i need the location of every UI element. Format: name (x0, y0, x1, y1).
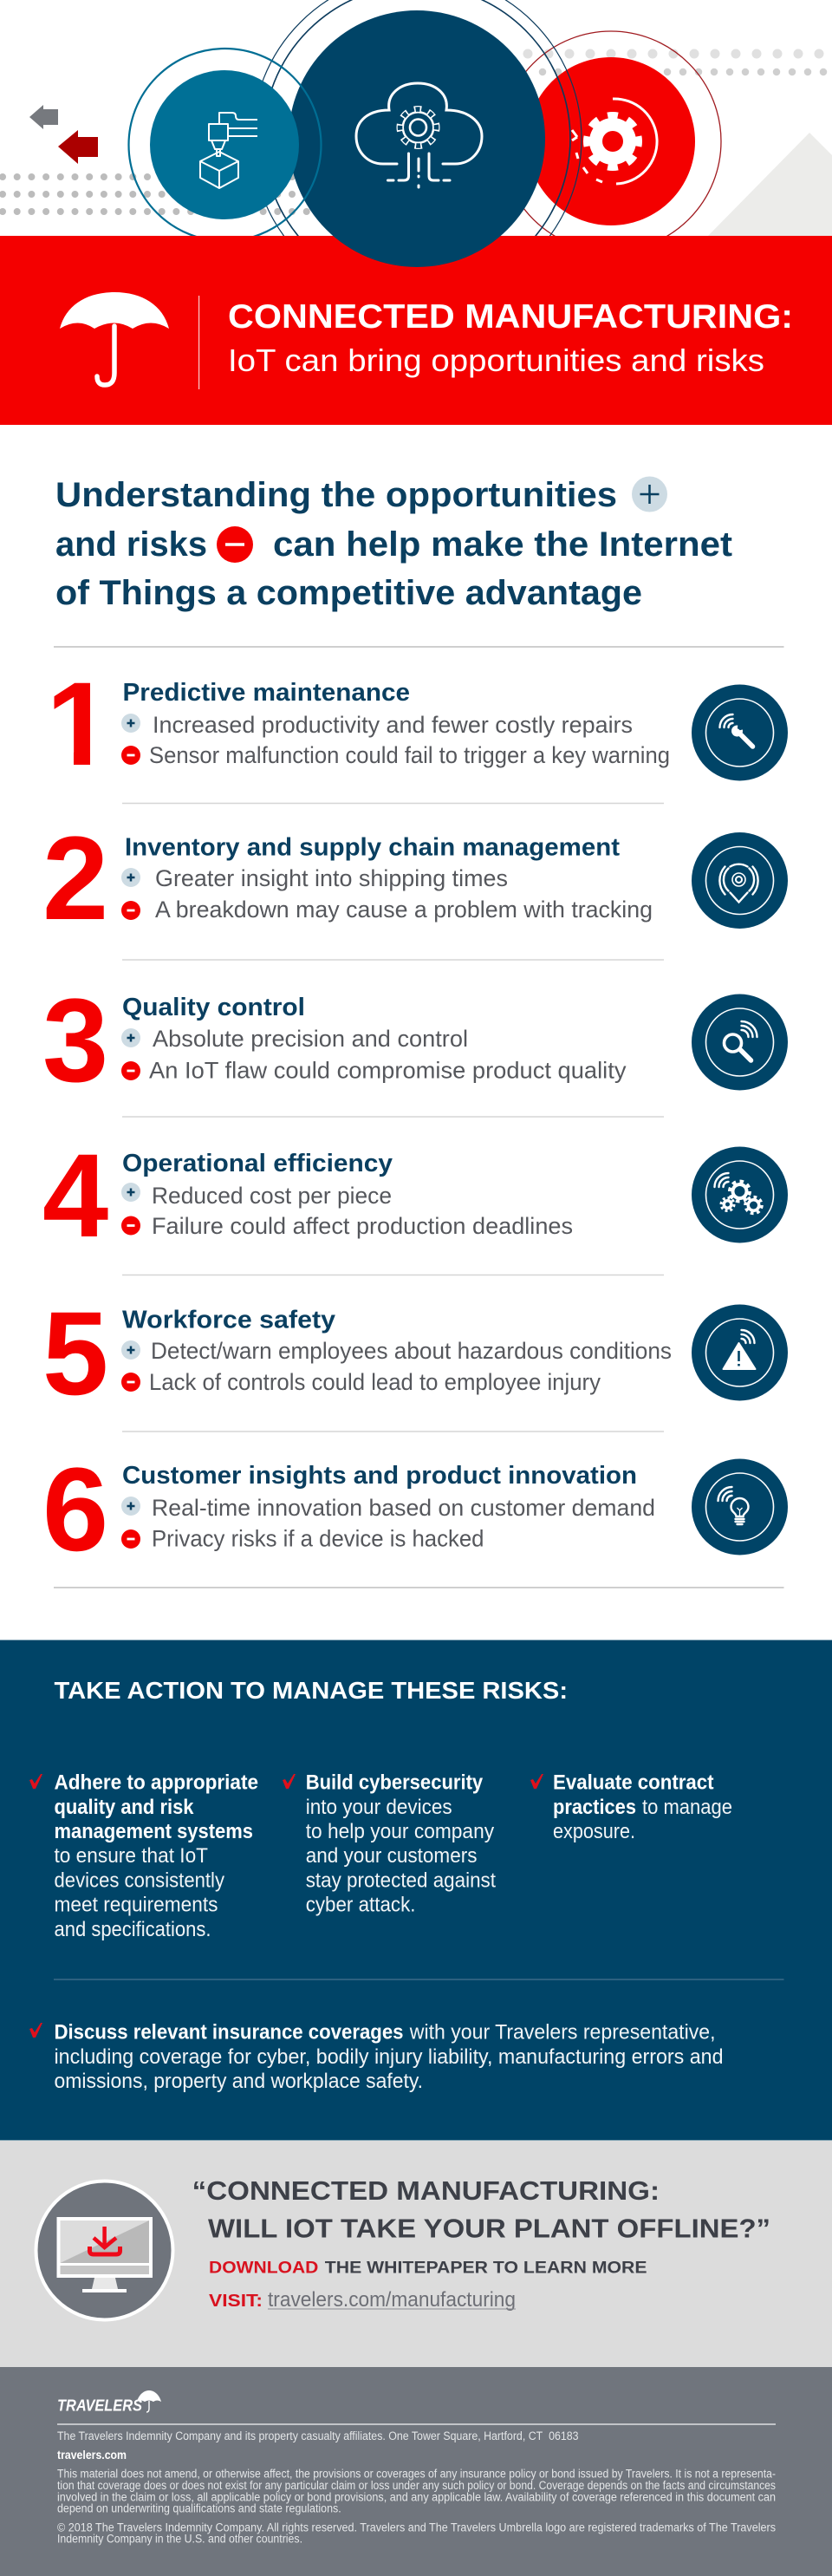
address: The Travelers Indemnity Company and its property casualty affiliates. One Tower Square, Hartford, CT 06183 (57, 2429, 579, 2442)
icon: monitor with download (36, 2181, 173, 2320)
section heading (55, 476, 732, 612)
risk: Privacy risks if a device is hacked (152, 1526, 484, 1552)
download line: THE WHITEPAPER TO LEARN MORE (325, 2260, 647, 2278)
action column 3 (553, 1771, 732, 1843)
number 1: 1 (46, 658, 112, 791)
insurance coverage text: including coverage for cyber, bodily injury liability, manufacturing errors and (54, 2045, 723, 2069)
visit line: travelers.com/manufacturing (268, 2288, 516, 2312)
Travelers logo (57, 2390, 161, 2415)
icon: 3D printer (200, 113, 257, 188)
plus bullet (121, 1340, 140, 1360)
disclaimer: involved in the claim or loss, all applicable policy or bond provisions, and any applicable law. Availability of coverage referenced in this document can (57, 2490, 776, 2503)
action column 2: into your devices (306, 1796, 452, 1819)
number 3: 3 (42, 975, 108, 1107)
outer rings of central circle (262, 0, 582, 236)
item title: Workforce safety (122, 1306, 335, 1334)
opportunity: Real-time innovation based on customer demand (152, 1495, 655, 1521)
action column 1: meet requirements (54, 1894, 218, 1917)
number 6: 6 (42, 1444, 108, 1576)
section heading: Understanding the opportunities (55, 476, 617, 514)
action column 3: to manage (642, 1796, 732, 1819)
icon: warning with signal (692, 1304, 788, 1401)
risk: An IoT flaw could compromise product quality (149, 1058, 627, 1084)
action column 2: Build cybersecurity (306, 1771, 484, 1795)
section heading: can help make the Internet (273, 525, 732, 564)
plus bullet (121, 1497, 140, 1516)
whitepaper title: “CONNECTED MANUFACTURING: (192, 2175, 660, 2206)
icon: magnifier with signal (692, 994, 788, 1091)
subtitle: IoT can bring opportunities and risks (228, 342, 764, 378)
action column 1: and specifications. (54, 1918, 211, 1941)
panel: whitepaper download: WILL IOT TAKE YOUR PLANT OFFLINE?” (208, 2214, 770, 2244)
action column 1: Adhere to appropriate (54, 1771, 258, 1795)
item 3: quality control (42, 975, 788, 1107)
panel heading: TAKE ACTION TO MANAGE THESE RISKS: (54, 1677, 568, 1704)
action column 2: to help your company (306, 1820, 494, 1843)
number 5: 5 (42, 1288, 108, 1420)
action column 2: and your customers (306, 1844, 477, 1868)
check mark 2 (283, 1774, 296, 1789)
copyright (57, 2521, 776, 2546)
disclaimer (57, 2468, 776, 2515)
plus bullet (121, 868, 140, 887)
hero illustration (0, 0, 832, 425)
plus bullet (121, 714, 140, 733)
check mark 4 (29, 2023, 42, 2038)
icon: light bulb with signal (692, 1458, 788, 1555)
item title: Predictive maintenance (123, 679, 410, 707)
download line (209, 2260, 647, 2278)
red banner (0, 236, 832, 425)
download line: DOWNLOAD (209, 2260, 318, 2278)
copyright: Indemnity Company in the U.S. and other countries. (57, 2533, 302, 2546)
icon: gears with signal (692, 1146, 788, 1243)
dotted rows left (3, 177, 310, 212)
insurance coverage text: omissions, property and workplace safety. (54, 2070, 423, 2093)
action column 1 (54, 1771, 258, 1941)
website: travelers.com (57, 2449, 127, 2462)
plus bullet (121, 1183, 140, 1202)
item title: Operational efficiency (122, 1150, 393, 1177)
action column 1: to ensure that IoT (54, 1844, 208, 1868)
panel: footer (0, 2367, 832, 2576)
circle: central dark blue (289, 10, 545, 267)
risk: A breakdown may cause a problem with tracking (155, 897, 653, 923)
risk: Sensor malfunction could fail to trigger a key warning (149, 742, 670, 768)
disclaimer: depend on underwriting qualifications and state regulations. (57, 2502, 341, 2515)
insurance coverage text: Discuss relevant insurance coverages (54, 2020, 404, 2044)
icon: wrench with signal (692, 685, 788, 780)
action column 3: practices (553, 1796, 636, 1819)
opportunity: Greater insight into shipping times (155, 865, 508, 891)
icon: location signal (692, 832, 788, 929)
item title: Quality control (122, 994, 305, 1021)
insurance coverage text (54, 2020, 723, 2093)
panel: take action (0, 1640, 832, 2140)
icon: plus (632, 477, 667, 512)
minus bullet (121, 1373, 140, 1392)
opportunity: Absolute precision and control (153, 1026, 468, 1052)
disclaimer: This material does not amend, or otherwise affect, the provisions or coverages of any insurance policy or bond issued by Travelers. It is not a representa- (57, 2468, 776, 2481)
item title: Inventory and supply chain management (125, 834, 620, 862)
plus bullet (121, 1028, 140, 1047)
risk: Failure could affect production deadlines (152, 1213, 573, 1239)
grey triangle (708, 133, 832, 236)
minus bullet (121, 1061, 140, 1080)
number 2: 2 (42, 812, 108, 945)
circle: red gear (523, 30, 722, 236)
action column 3: exposure. (553, 1820, 635, 1843)
item 5: workforce safety (42, 1288, 788, 1420)
banner divider (198, 296, 200, 389)
circle: teal 3D printing (150, 70, 299, 219)
minus bullet (121, 1529, 140, 1549)
action column 2 (306, 1771, 496, 1917)
minus bullet (121, 1216, 140, 1235)
icon: minus (217, 526, 253, 563)
arrow: grey (29, 105, 58, 129)
section heading: of Things a competitive advantage (55, 574, 642, 612)
item 1: predictive maintenance (54, 682, 788, 780)
action column 1: quality and risk (54, 1796, 194, 1819)
copyright: © 2018 The Travelers Indemnity Company. All rights reserved. Travelers and The Travelers Umbrella logo are registered trademarks of The Travelers (57, 2521, 776, 2534)
action column 3: Evaluate contract (553, 1771, 714, 1795)
check mark 3 (530, 1774, 543, 1789)
main title: CONNECTED MANUFACTURING: (228, 298, 793, 336)
insurance coverage text: with your Travelers representative, (409, 2020, 716, 2044)
section heading: and risks (55, 525, 207, 564)
item 6: customer insights (42, 1444, 788, 1576)
check mark 1 (29, 1774, 42, 1789)
opportunity: Detect/warn employees about hazardous conditions (151, 1338, 672, 1364)
number 4: 4 (42, 1130, 108, 1262)
ring: teal (128, 49, 321, 241)
Travelers logo: TRAVELERS (57, 2397, 142, 2415)
arrow: dark red (58, 130, 98, 164)
action column 1: management systems (54, 1820, 253, 1843)
item 2: inventory (42, 812, 788, 945)
minus bullet (121, 746, 140, 765)
minus bullet (121, 901, 140, 920)
action column 1: devices consistently (54, 1869, 224, 1892)
icon: Travelers umbrella (60, 292, 169, 385)
item 4: operational efficiency (42, 1130, 788, 1262)
panel: whitepaper download (0, 2141, 832, 2367)
visit line: VISIT: (209, 2292, 263, 2311)
risk: Lack of controls could lead to employee injury (149, 1369, 601, 1395)
dotted rows right (528, 54, 832, 72)
item title: Customer insights and product innovation (122, 1462, 637, 1490)
action column 2: cyber attack. (306, 1894, 416, 1917)
opportunity: Reduced cost per piece (152, 1183, 392, 1209)
banner content (60, 292, 793, 389)
opportunity: Increased productivity and fewer costly repairs (153, 712, 633, 738)
disclaimer: tion that coverage does or does not exist for any particular claim or loss under any such policy or bond. Coverage depends on the facts and circumstances (57, 2479, 776, 2492)
icon: cloud with gear (356, 83, 482, 187)
action column 2: stay protected against (306, 1869, 496, 1892)
